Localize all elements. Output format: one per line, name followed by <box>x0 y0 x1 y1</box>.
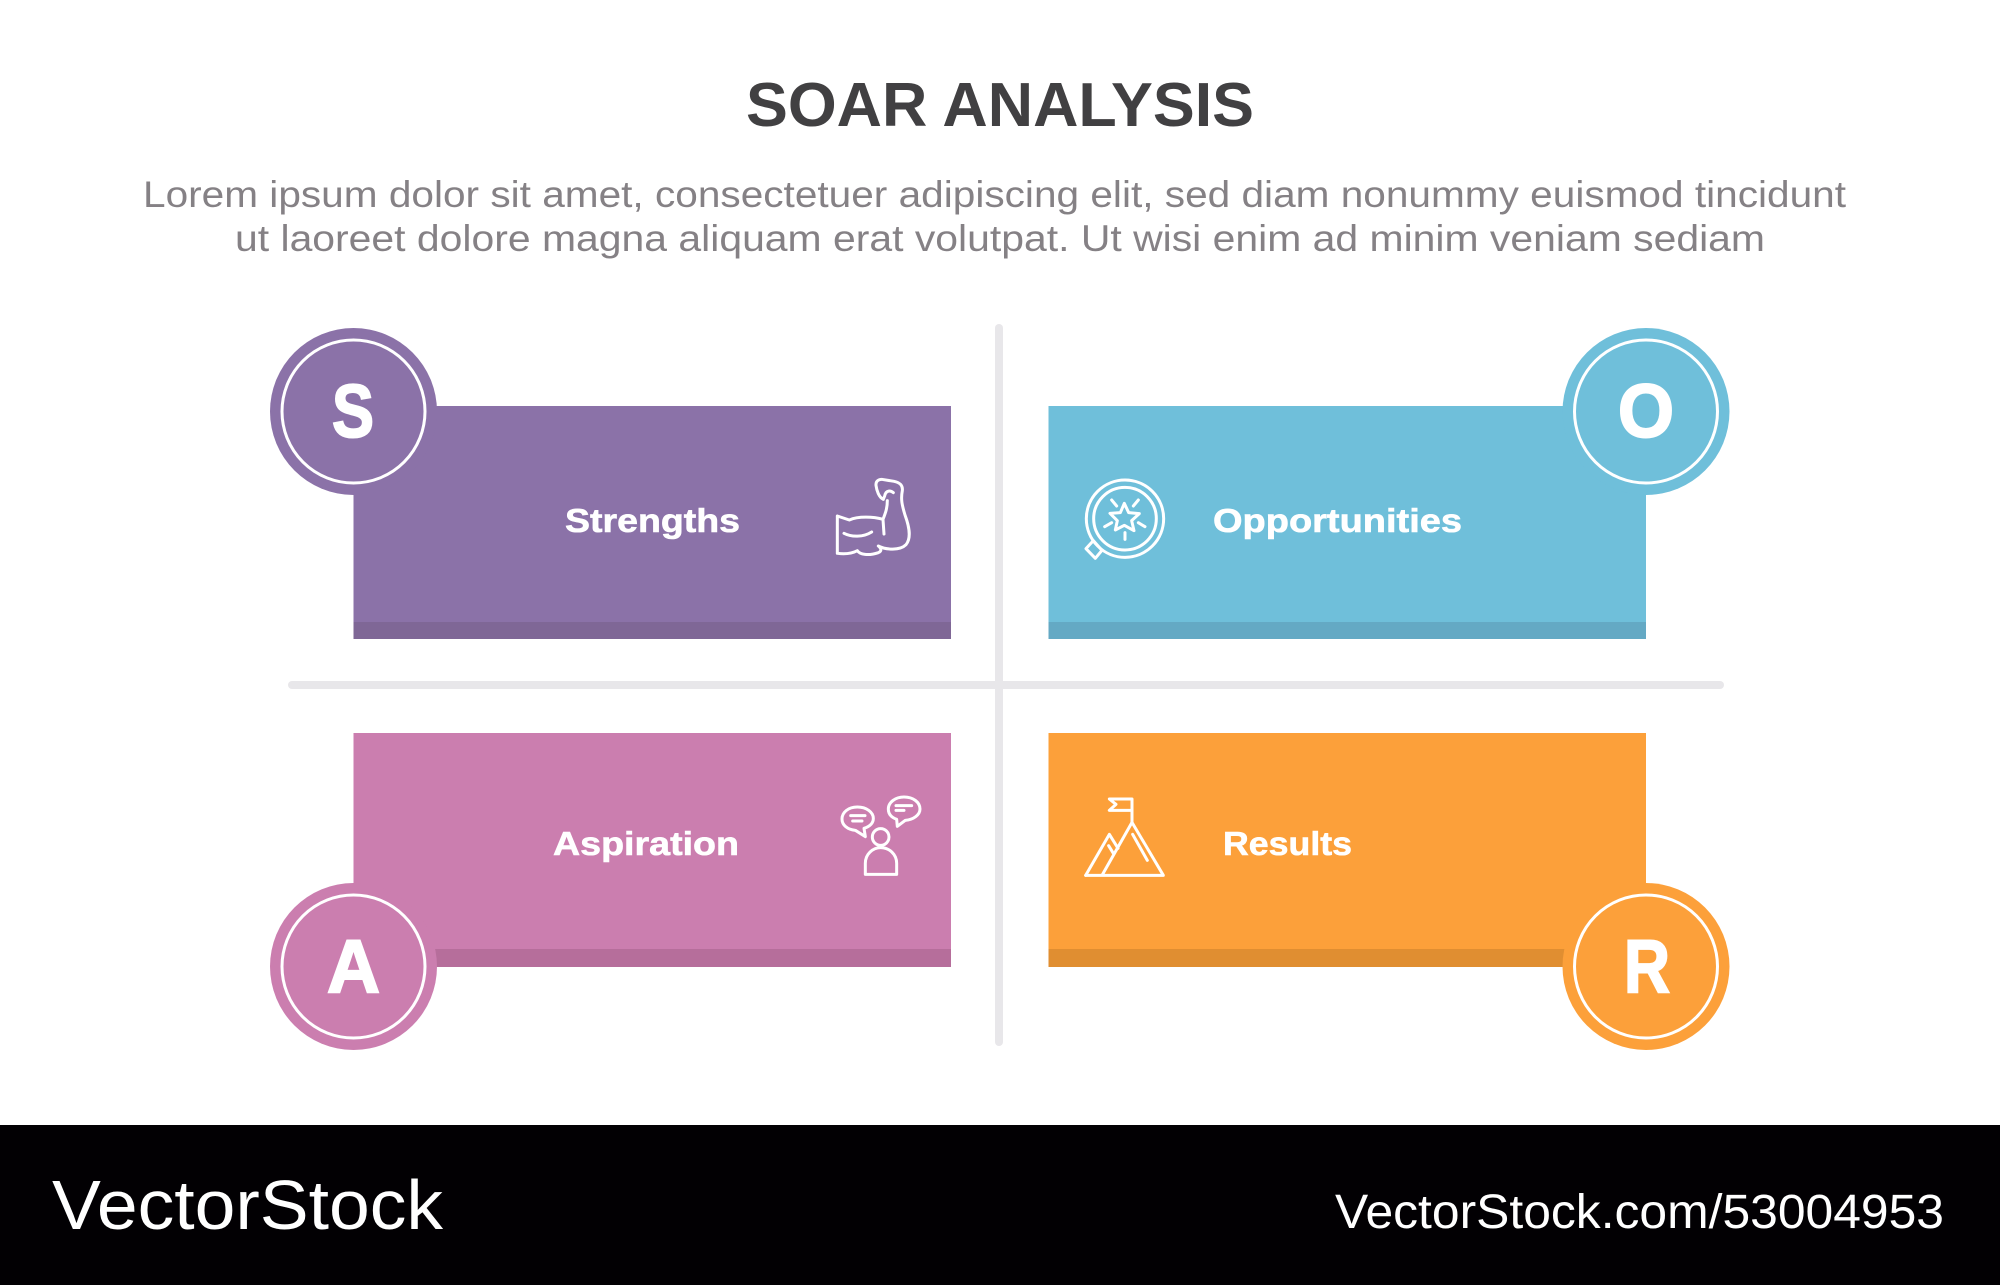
icon: mountain with flag <box>1086 799 1163 875</box>
strengths card bottom band <box>354 622 951 639</box>
opportunities badge <box>1562 328 1730 495</box>
title: SOAR ANALYSIS <box>746 71 1254 140</box>
icon: person with speech bubbles <box>842 797 920 874</box>
aspiration badge <box>270 883 437 1050</box>
strengths label: Strengths <box>565 502 740 539</box>
strengths card <box>354 406 951 639</box>
panel: aspiration <box>270 733 951 1050</box>
subtitle text block <box>143 174 1847 259</box>
aspiration badge: A <box>327 924 380 1008</box>
footer url text: VectorStock.com/53004953 <box>1335 1186 1944 1239</box>
icon: flexed arm <box>837 479 909 555</box>
opportunities card <box>1048 406 1646 639</box>
footer logo text: VectorStock <box>52 1166 444 1244</box>
strengths badge <box>270 328 437 495</box>
aspiration card <box>354 733 951 967</box>
panel: strengths <box>270 328 951 639</box>
icon: magnifier with star <box>1086 480 1164 558</box>
panel: results <box>1048 733 1730 1050</box>
footer band <box>0 1125 2000 1285</box>
aspiration label: Aspiration <box>553 825 739 862</box>
results badge: R <box>1624 924 1670 1008</box>
results card <box>1048 733 1646 967</box>
subtitle text block: ut laoreet dolore magna aliquam erat volutpat. Ut wisi enim ad minim veniam sediam <box>235 218 1765 259</box>
results card bottom band <box>1048 949 1646 967</box>
subtitle text block: Lorem ipsum dolor sit amet, consectetuer adipiscing elit, sed diam nonummy euismod tincidunt <box>143 174 1847 215</box>
opportunities label: Opportunities <box>1213 502 1462 539</box>
results label: Results <box>1223 825 1352 862</box>
panel: opportunities <box>1048 328 1730 639</box>
opportunities badge: O <box>1618 369 1674 453</box>
opportunities card bottom band <box>1048 622 1646 639</box>
strengths badge: S <box>332 369 374 453</box>
results badge <box>1562 883 1730 1050</box>
aspiration card bottom band <box>354 949 951 967</box>
